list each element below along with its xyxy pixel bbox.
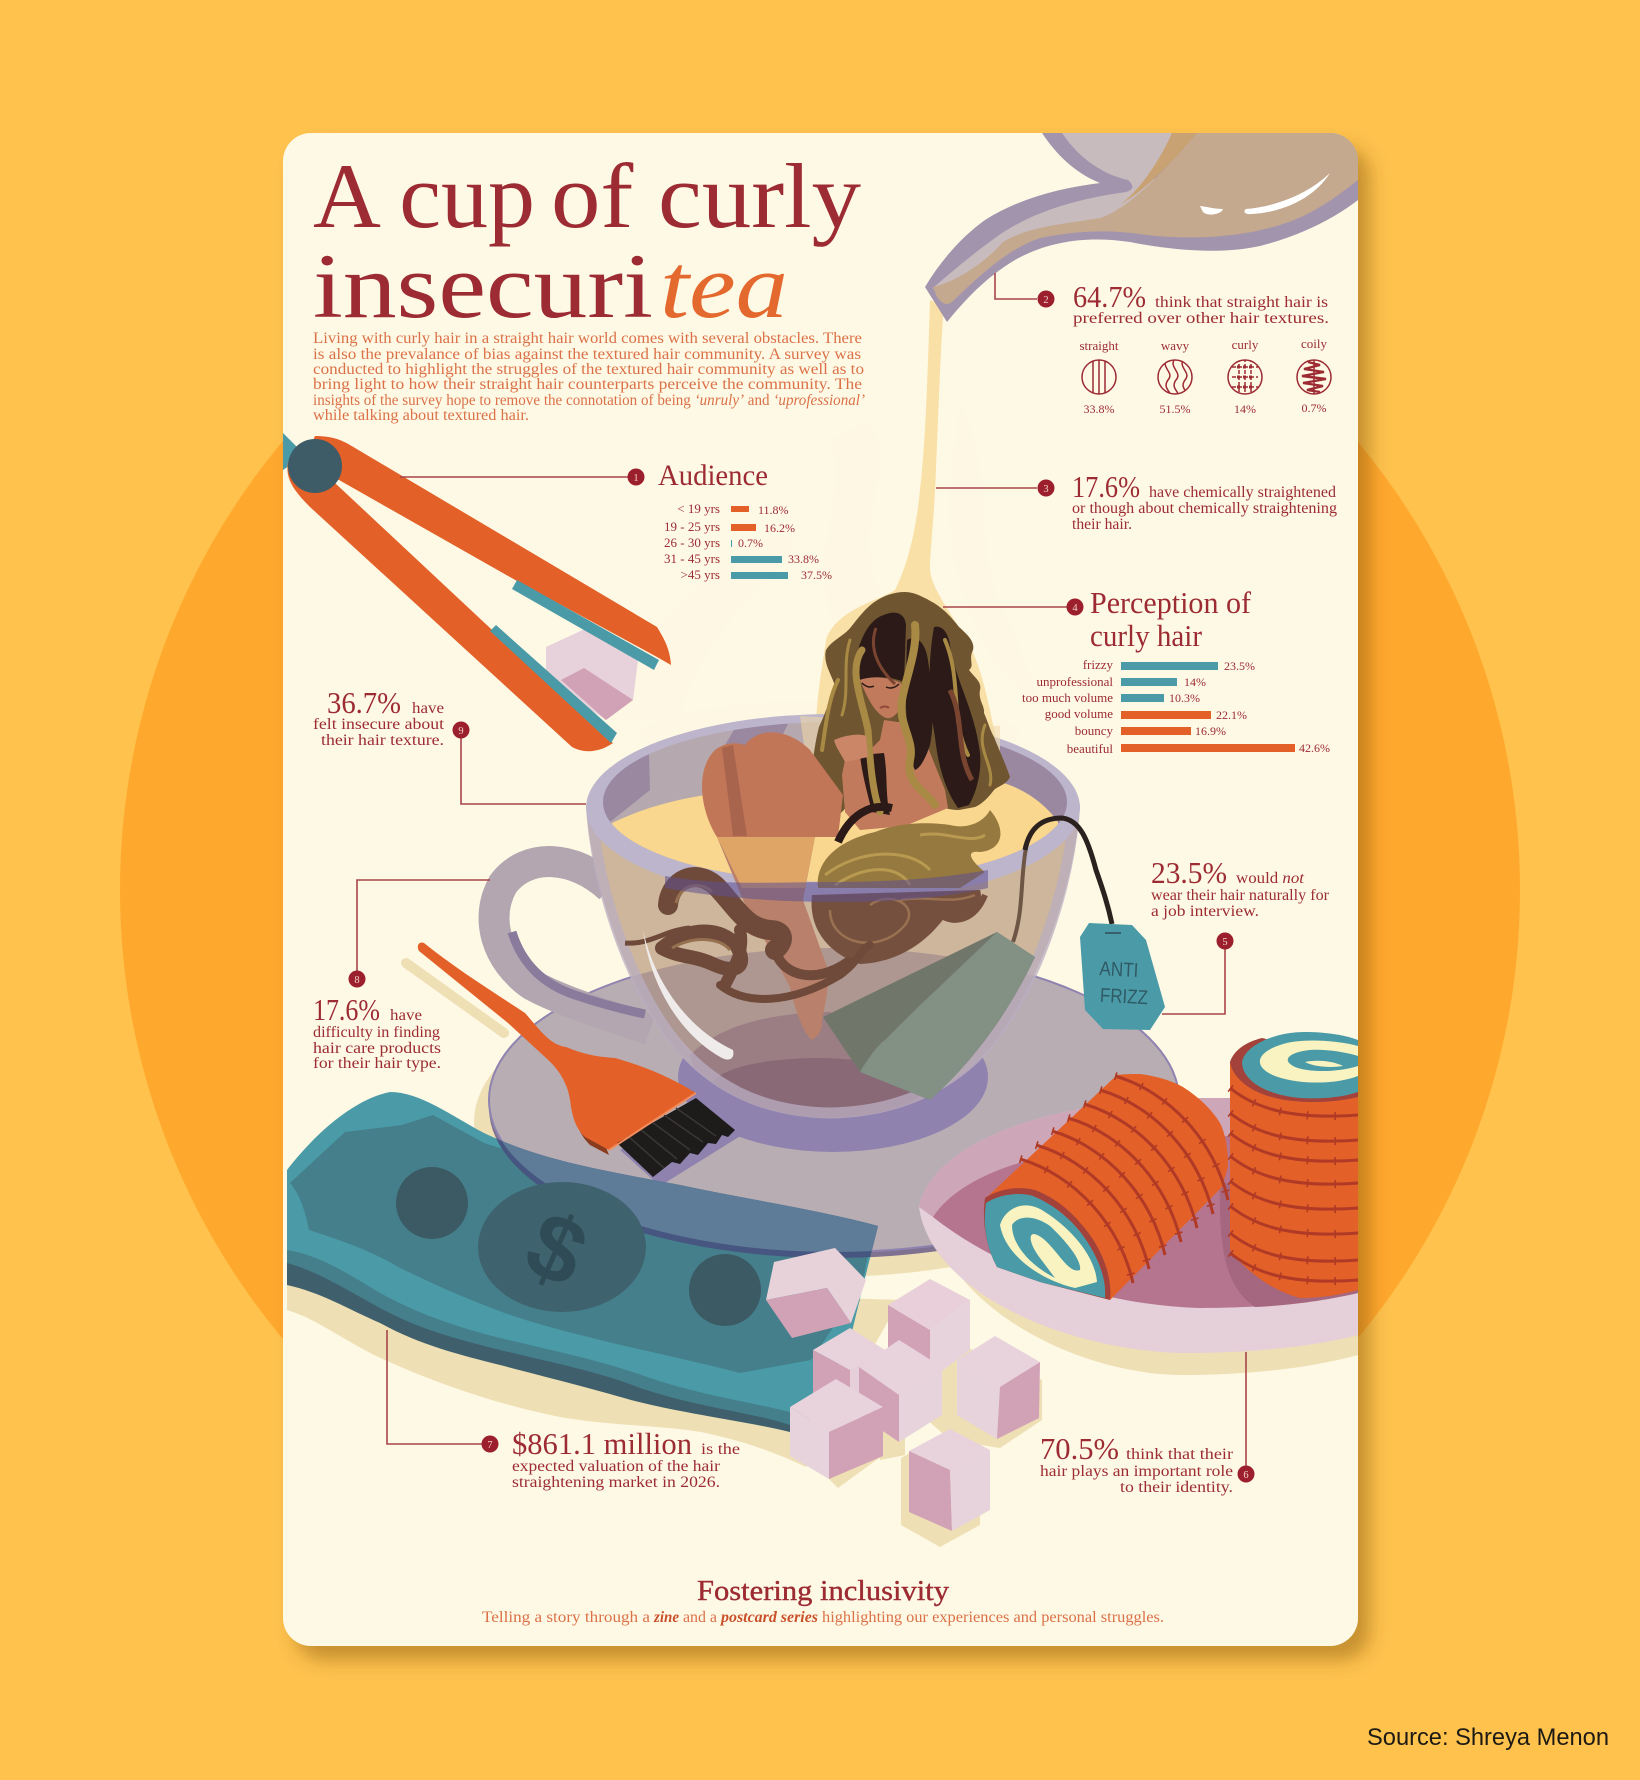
teapot spout: [925, 133, 1358, 322]
source credit: Source: Shreya Menon: [1367, 1724, 1609, 1751]
audience bar chart: [664, 501, 832, 582]
teabag tag with string: ANTI: [1099, 958, 1139, 982]
hair type labels: wavy: [1161, 338, 1190, 353]
plate shadow: [962, 1279, 1358, 1375]
saucer shadow: [474, 1070, 950, 1276]
cube back left: [813, 1328, 885, 1420]
banknote body: [287, 1092, 878, 1420]
halo over rim: [800, 716, 1000, 755]
perception bar chart: bouncy: [1075, 723, 1113, 738]
callout 8: hair care products: 17.6%: [313, 992, 380, 1027]
torso: [842, 720, 948, 830]
intro paragraph: Living with curly hair in a straight hair world comes with several obstacles. There: [313, 330, 862, 347]
title: [313, 145, 861, 337]
face: [860, 677, 902, 718]
footer text: Telling a story through a: [482, 1609, 650, 1626]
sugar cubes: [766, 1248, 1042, 1547]
teabag string back: [1013, 848, 1026, 942]
callout 6: identity: hair plays an important role: [1040, 1463, 1233, 1480]
audience bar chart: 26 - 30 yrs: [664, 535, 720, 550]
cube middle: [859, 1340, 942, 1442]
footer text: [482, 1609, 1164, 1626]
perception bar chart: [1022, 657, 1330, 756]
audience bar chart: 33.8%: [788, 552, 819, 566]
title: tea: [660, 235, 788, 337]
callout 5: job interview: a job interview.: [1151, 903, 1259, 920]
callout 2: straight hair preferred: 64.7%: [1073, 279, 1146, 314]
brush bristles shadow: [620, 1108, 742, 1186]
straight icon: [1082, 358, 1116, 396]
callout 9: insecure: 36.7%: [327, 685, 401, 720]
callout 5: job interview: [1151, 855, 1330, 1014]
audience bar chart: 31 - 45 yrs: [664, 551, 720, 566]
callout 2: straight hair preferred: think that straight hair is: [1155, 294, 1328, 311]
card panel: [283, 133, 1358, 1646]
callout 7: market valuation: 7: [487, 1440, 493, 1451]
callout 9: insecure: 9: [458, 726, 464, 737]
hair straightener: [283, 433, 671, 751]
footer text: highlighting our experiences and personal struggles.: [822, 1609, 1164, 1626]
callout 3: chemically straightened: their hair.: [1072, 516, 1132, 533]
callout 9: insecure: felt insecure about: [313, 716, 445, 733]
perception bar chart: beautiful: [1067, 741, 1113, 756]
saucer seen through note: [489, 948, 1179, 1258]
cup shadow: [678, 1057, 988, 1152]
title: of curly: [551, 145, 861, 247]
callout 8: hair care products: hair care products: [313, 1040, 441, 1057]
banknote: [287, 948, 1179, 1467]
hair type labels: 14%: [1234, 402, 1256, 416]
title: insecuri: [313, 235, 653, 337]
curl at shoulder: [838, 807, 892, 842]
callout 4: perception of curly hair: Perception of: [1090, 585, 1252, 620]
cube right: [957, 1336, 1040, 1439]
teabag tag with string: [1025, 818, 1165, 1030]
golden hair in tea: [818, 810, 1000, 888]
callout 7: market valuation: [387, 1330, 740, 1491]
vertical roller: [1230, 1032, 1358, 1298]
hinge: [288, 439, 342, 493]
glass edge: [592, 815, 1074, 1113]
cube lower left: [790, 1379, 883, 1479]
coin centre: [478, 1182, 646, 1312]
wavy icon: [1158, 358, 1192, 396]
submerged leg: [717, 837, 828, 1040]
eyelids: [862, 683, 899, 688]
tint brush: [418, 943, 742, 1186]
brown strands: [950, 690, 972, 780]
banknote edge: [287, 1220, 860, 1432]
callout 5: job interview: wear their hair naturally for: [1151, 887, 1330, 904]
brown hair under water: [812, 890, 981, 964]
callout 7: market valuation: is the: [701, 1441, 740, 1458]
brush handle: [418, 943, 696, 1150]
perception bar chart: too much volume: [1022, 690, 1113, 705]
audience bar chart: < 19 yrs: [677, 501, 720, 516]
footer text: postcard series: [719, 1609, 818, 1626]
perception bar chart: 10.3%: [1169, 691, 1200, 705]
coin right: [689, 1254, 761, 1326]
callout 8: hair care products: difficulty in finding: [313, 1024, 440, 1041]
hair type labels: 0.7%: [1302, 401, 1326, 415]
cup: [586, 714, 1080, 1152]
straightener plates: [490, 580, 659, 743]
callout 3: chemically straightened: or though about chemically straightening: [1072, 500, 1337, 517]
callout 8: hair care products: 8: [354, 975, 360, 986]
coin left: [396, 1167, 468, 1239]
callout 8: hair care products: for their hair type.: [313, 1055, 441, 1072]
perception bar chart: 14%: [1184, 675, 1206, 689]
callout 8: hair care products: have: [390, 1007, 422, 1024]
audience bar chart: 37.5%: [801, 568, 832, 582]
hair type labels: [1080, 336, 1327, 416]
knee crease: [722, 745, 747, 836]
straightener lower arm: [287, 462, 613, 751]
lips: [880, 706, 889, 708]
rim: [586, 714, 1080, 902]
cube on banknote: [766, 1248, 866, 1338]
callout 3: chemically straightened: 3: [1043, 484, 1049, 495]
tea surface: [612, 783, 1058, 882]
dollar sign: $: [511, 1190, 602, 1307]
woman: [625, 592, 1010, 1040]
roller cap: [1230, 1038, 1358, 1102]
hair type labels: coily: [1301, 336, 1327, 351]
perception bar chart: 16.9%: [1195, 724, 1226, 738]
saucer: [489, 948, 1179, 1258]
callout 9: insecure: their hair texture.: [321, 732, 444, 749]
footer text: and a: [683, 1609, 717, 1626]
audience bar chart: >45 yrs: [681, 567, 720, 582]
cup body: [586, 805, 1080, 976]
perception bar chart: 23.5%: [1224, 659, 1255, 673]
perception bar chart: unprofessional: [1036, 674, 1113, 689]
curls left: [662, 877, 870, 999]
front lip of cup over figure: [665, 870, 988, 902]
footer text: zine: [653, 1609, 679, 1626]
teabag: [823, 932, 1035, 1100]
back hair: [812, 592, 1010, 817]
hand: [834, 735, 868, 762]
curly icon: [1228, 358, 1262, 396]
callout 1: audience: 1: [633, 473, 639, 484]
callout 3: chemically straightened: have chemically straightened: [1149, 484, 1336, 501]
callout 4: perception of curly hair: curly hair: [1090, 618, 1203, 653]
hair type labels: straight: [1080, 338, 1119, 353]
cube back centre: [888, 1279, 970, 1380]
callout 1: audience: Audience: [658, 459, 768, 492]
callout 2: straight hair preferred: [995, 273, 1329, 327]
illustration: [283, 133, 1358, 1547]
callout 1: audience: [400, 459, 832, 582]
intro paragraph: conducted to highlight the struggles of the textured hair community as well as to: [313, 361, 864, 378]
dark hair: [856, 613, 980, 815]
roller ribs: [1230, 1088, 1358, 1281]
steam wisps: [600, 400, 1040, 770]
intro paragraph: is also the prevalance of bias against the textured hair community. A survey was: [313, 346, 861, 363]
right strand under water: [940, 895, 985, 920]
callout 4: perception of curly hair: [943, 585, 1330, 756]
footer heading: Fostering inclusivity: [697, 1575, 950, 1607]
callout 8: hair care products: [313, 880, 490, 1072]
hair type icons: [1080, 336, 1331, 416]
glass over saucer: [640, 948, 1009, 1118]
cube bottom: [909, 1429, 990, 1531]
perception bar chart: 42.6%: [1299, 741, 1330, 755]
hair type labels: 51.5%: [1160, 402, 1190, 416]
intro paragraph: [313, 330, 865, 424]
callout 5: job interview: 5: [1222, 937, 1228, 948]
callout 6: identity: [1040, 1352, 1254, 1496]
plate: [919, 1098, 1358, 1353]
audience bar chart: 0.7%: [738, 536, 763, 550]
cup highlight: [643, 930, 733, 1060]
horizontal roller: [984, 1074, 1228, 1300]
brush shadow: [406, 963, 504, 1033]
cube shadows: [790, 1340, 1042, 1547]
title: A cup: [313, 145, 535, 247]
background circle: [120, 190, 1520, 1590]
callout 3: chemically straightened: 17.6%: [1072, 469, 1140, 504]
callout 7: market valuation: straightening market in 2026.: [512, 1474, 720, 1491]
teabag tag with string: FRIZZ: [1099, 985, 1148, 1009]
brush bristles: [617, 1098, 735, 1177]
callout 5: job interview: 23.5%: [1151, 855, 1227, 890]
audience bar chart: 11.8%: [758, 503, 789, 517]
brush handle shadow edge: [568, 1085, 609, 1155]
callout 5: job interview: would not: [1236, 870, 1305, 887]
callout 4: perception of curly hair: 4: [1072, 603, 1078, 614]
perception bar chart: good volume: [1045, 706, 1113, 721]
knee: [702, 732, 843, 837]
callout 7: market valuation: expected valuation of the hair: [512, 1458, 721, 1475]
callout 2: straight hair preferred: preferred over other hair textures.: [1073, 310, 1329, 327]
roller ribs: [1020, 1076, 1228, 1283]
callout 6: identity: to their identity.: [1120, 1479, 1233, 1496]
intro paragraph: while talking about textured hair.: [313, 407, 529, 424]
callout 9: insecure: have: [412, 700, 444, 717]
callout 6: identity: think that their: [1126, 1446, 1234, 1463]
perception bar chart: frizzy: [1083, 657, 1113, 672]
audience bar chart: 19 - 25 yrs: [664, 519, 720, 534]
callout 3: chemically straightened: [936, 469, 1337, 533]
coily icon: [1297, 360, 1331, 394]
audience bar chart: 16.2%: [764, 521, 795, 535]
roller end cap: [984, 1188, 1110, 1300]
hair type labels: curly: [1232, 337, 1259, 352]
callout 6: identity: 70.5%: [1040, 1431, 1119, 1466]
banknote panel: [290, 1115, 874, 1373]
perception bar chart: 22.1%: [1216, 708, 1247, 722]
intro paragraph: insights of the survey hope to remove the connotation of being ‘unruly’ and ‘uprofessional’: [313, 392, 865, 409]
straightener upper arm: [300, 436, 671, 665]
hair type labels: 33.8%: [1084, 402, 1114, 416]
callout 6: identity: 6: [1243, 1470, 1249, 1481]
tea stream: [815, 300, 1000, 760]
callout 9: insecure: [313, 685, 586, 804]
cup handle: [494, 862, 650, 1030]
callout 2: straight hair preferred: 2: [1043, 295, 1049, 306]
golden strands: [822, 625, 991, 812]
callout 7: market valuation: $861.1 million: [512, 1426, 692, 1461]
intro paragraph: bring light to how their straight hair counterparts perceive the community. The: [313, 376, 862, 393]
highlights: [1200, 173, 1330, 215]
back wall: [610, 722, 1058, 824]
straightener teal end: [283, 433, 296, 470]
banknote shadow: [287, 1280, 900, 1467]
sugar cube in straightener: [546, 628, 638, 720]
